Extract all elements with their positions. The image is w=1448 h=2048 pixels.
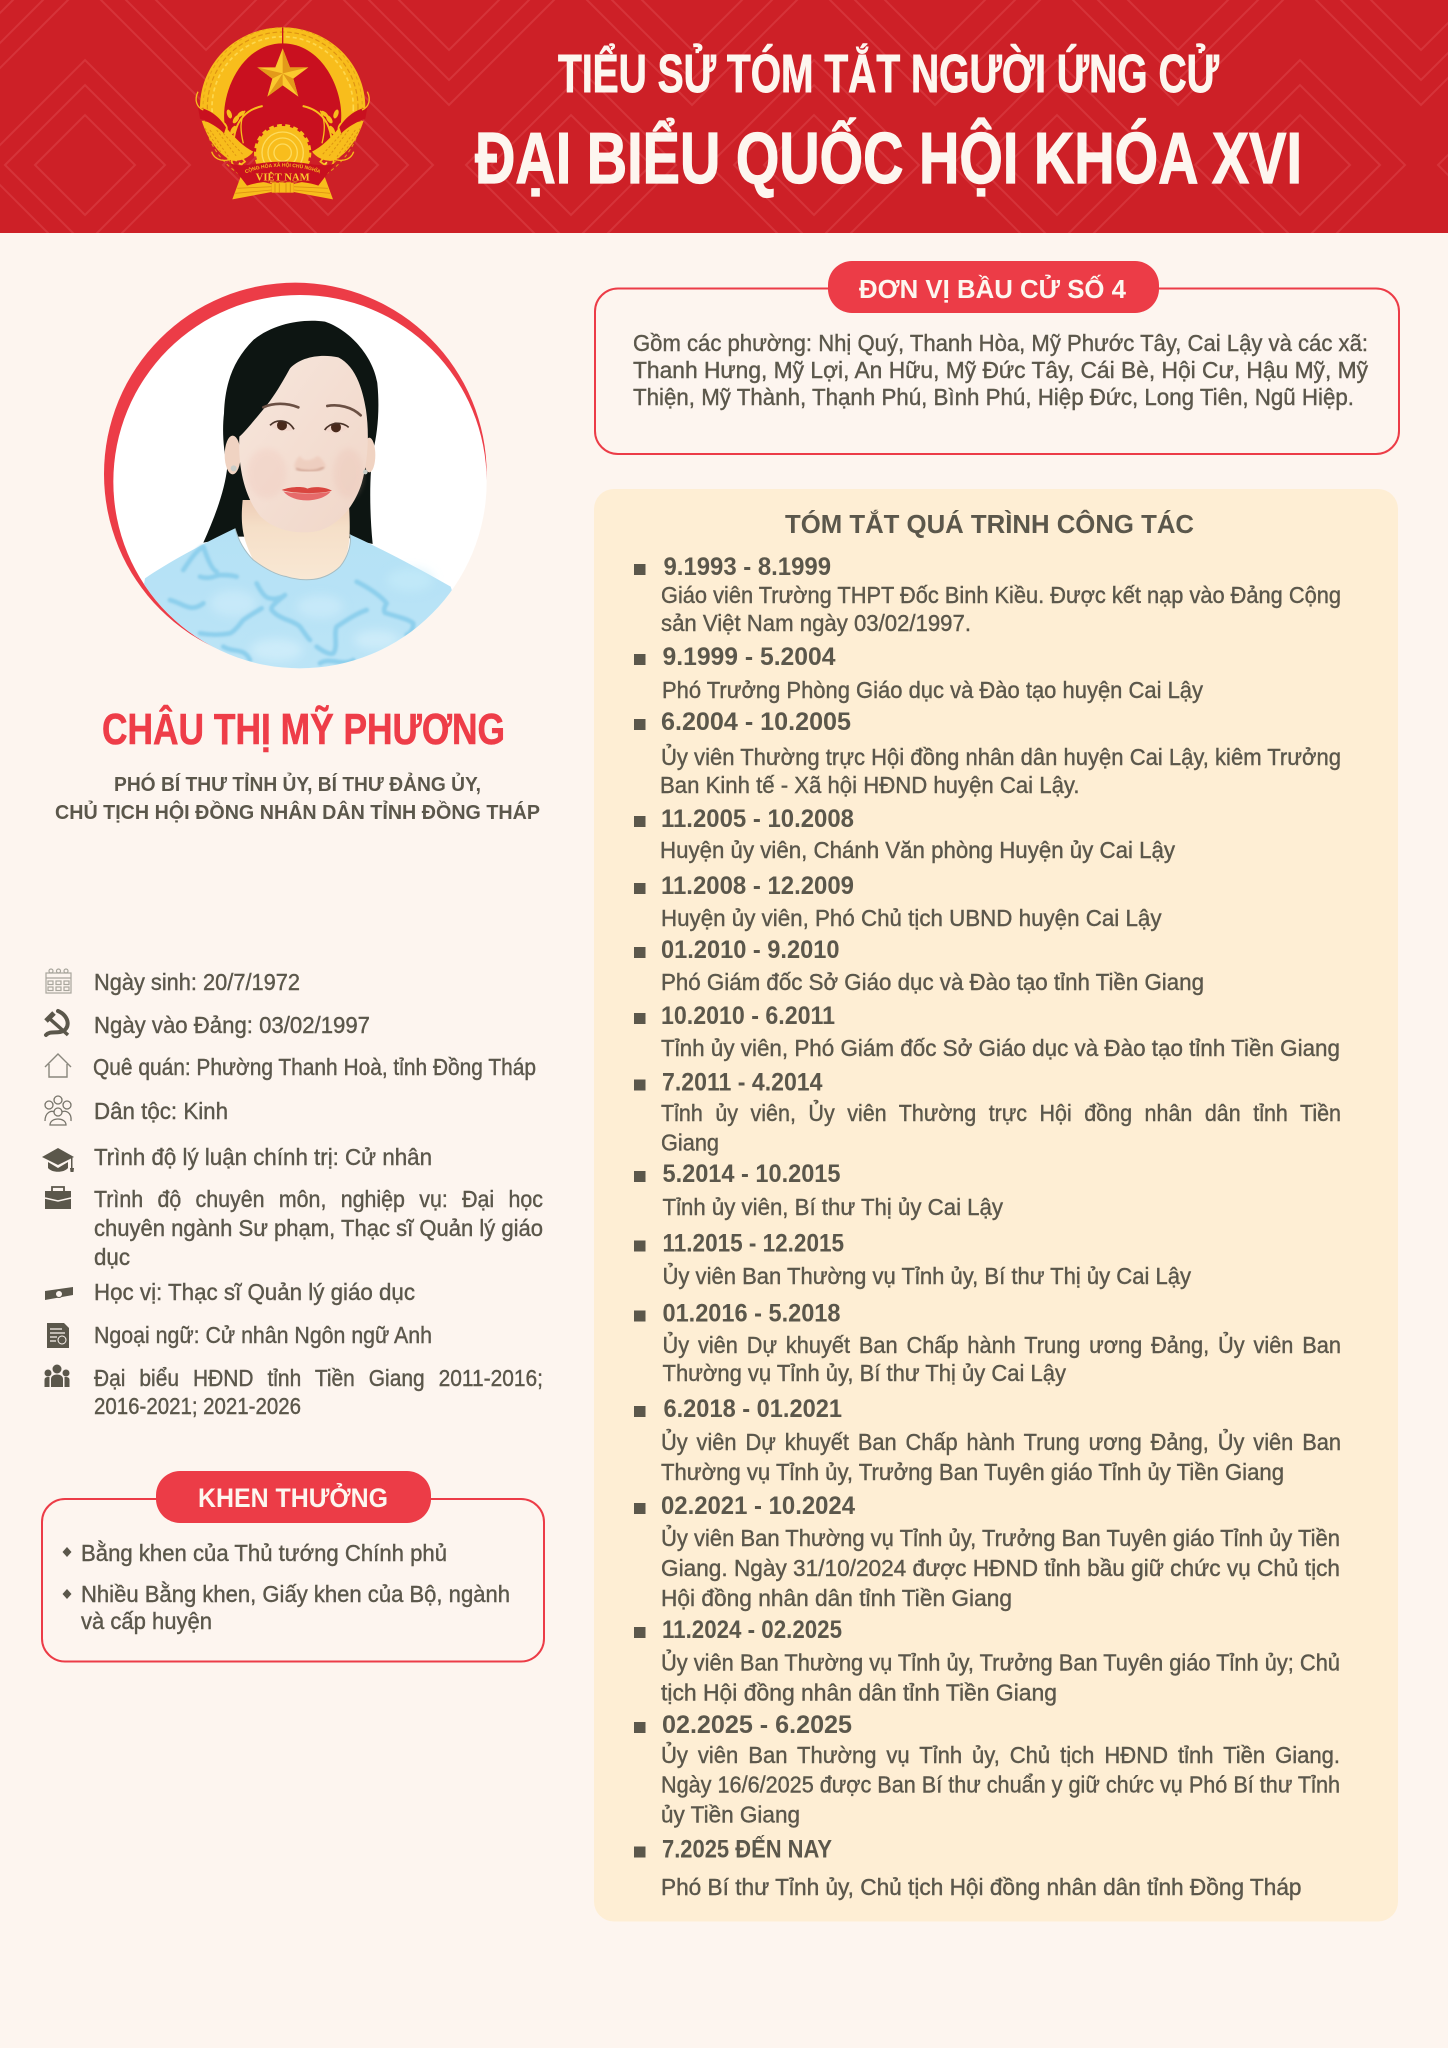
- entry 4: 11.2005 - 10.2008: [661, 805, 854, 833]
- entry 3: Ban Kinh tế - Xã hội HĐND huyện Cai Lậy.: [660, 772, 1080, 798]
- entry 3: Ủy viên Thường trực Hội đồng nhân dân huyện Cai Lậy, kiêm Trưởng: [661, 742, 1341, 770]
- heading pill: awards: [156, 1471, 431, 1523]
- entry 15: 02.2025 - 6.2025: [662, 1711, 852, 1739]
- icon: hammer and sickle: [46, 1011, 68, 1035]
- entry 5: [661, 872, 1162, 931]
- entry 11: [662, 1300, 1341, 1386]
- position: PHÓ BÍ THƯ TỈNH ỦY, BÍ THƯ ĐẢNG ỦY,: [114, 772, 481, 796]
- text: languages: Ngoại ngữ: Cử nhân Ngôn ngữ Anh: [94, 1322, 432, 1348]
- entry 4: [660, 805, 1175, 863]
- entry 15: Ủy viên Ban Thường vụ Tỉnh ủy, Chủ tịch HĐND tỉnh Tiền Giang.: [661, 1740, 1340, 1768]
- entry 16: Phó Bí thư Tỉnh ủy, Chủ tịch Hội đồng nhân dân tỉnh Đồng Tháp: [661, 1874, 1302, 1900]
- heading pill: awards: KHEN THƯỞNG: [198, 1483, 388, 1513]
- icon: national emblem: VIỆT NAM: [256, 171, 310, 184]
- header banner: [0, 0, 1448, 233]
- text: ethnicity: Dân tộc: Kinh: [94, 1098, 228, 1124]
- panel: awards: Nhiều Bằng khen, Giấy khen của Bộ, ngành: [81, 1581, 510, 1607]
- entry 10: [662, 1230, 1191, 1289]
- entry 12: Ủy viên Dự khuyết Ban Chấp hành Trung ương Đảng, Ủy viên Ban: [661, 1427, 1341, 1455]
- icon: graduation cap: [42, 1148, 74, 1172]
- title: TIỂU SỬ TÓM TẮT NGƯỜI ỨNG CỬ: [558, 43, 1219, 104]
- entry 14: 11.2024 - 02.2025: [662, 1616, 842, 1644]
- entry 8: Tỉnh ủy viên, Ủy viên Thường trực Hội đồng nhân dân tỉnh Tiền: [661, 1098, 1341, 1126]
- heading pill: constituency: [828, 261, 1159, 313]
- entry 1: sản Việt Nam ngày 03/02/1997.: [661, 610, 971, 636]
- text: hometown: Quê quán: Phường Thanh Hoà, tỉnh Đồng Tháp: [93, 1054, 536, 1080]
- text: qualification: Trình độ chuyên môn, nghiệp vụ: Đại học: [94, 1186, 543, 1212]
- entry 7: Tỉnh ủy viên, Phó Giám đốc Sở Giáo dục và Đào tạo tỉnh Tiền Giang: [661, 1035, 1340, 1061]
- entry 9: 5.2014 - 10.2015: [662, 1160, 841, 1188]
- text: council delegate: Đại biểu HĐND tỉnh Tiền Giang 2011-2016;: [94, 1365, 543, 1391]
- entry 16: 7.2025 ĐẾN NAY: [662, 1834, 832, 1864]
- panel: career summary: [594, 489, 1398, 1922]
- entry 13: Hội đồng nhân dân tỉnh Tiền Giang: [661, 1585, 1012, 1611]
- entry 12: [661, 1395, 1341, 1485]
- icon: calendar: [46, 969, 71, 993]
- text: political theory: Trình độ lý luận chính trị: Cử nhân: [94, 1144, 432, 1170]
- entry 8: [661, 1068, 1341, 1156]
- entry 1: 9.1993 - 8.1999: [664, 553, 831, 581]
- entry 6: Phó Giám đốc Sở Giáo dục và Đào tạo tỉnh Tiền Giang: [661, 969, 1204, 995]
- text: party date: Ngày vào Đảng: 03/02/1997: [94, 1012, 370, 1038]
- entry 6: [661, 936, 1204, 995]
- entry 10: 11.2015 - 12.2015: [662, 1230, 844, 1258]
- entry 11: Thường vụ Tỉnh ủy, Bí thư Thị ủy Cai Lậy: [662, 1360, 1066, 1386]
- entry 14: tịch Hội đồng nhân dân tỉnh Tiền Giang: [661, 1680, 1057, 1706]
- entry 9: [662, 1160, 1003, 1220]
- panel: awards: [42, 1471, 544, 1662]
- panel: constituency: Gồm các phường: Nhị Quý, Thanh Hòa, Mỹ Phước Tây, Cai Lậy và các xã:: [633, 330, 1368, 356]
- entry 13: [661, 1492, 1340, 1611]
- icon: home: [45, 1054, 71, 1077]
- entry 15: ủy Tiền Giang: [661, 1802, 800, 1828]
- icon: briefcase: [45, 1187, 71, 1209]
- icon: national emblem: [196, 27, 370, 200]
- entry 3: [660, 708, 1341, 798]
- text: council delegate: 2016-2021; 2021-2026: [94, 1393, 301, 1419]
- heading pill: constituency: ĐƠN VỊ BẦU CỬ SỐ 4: [859, 273, 1127, 304]
- personal details list: [42, 969, 543, 1419]
- entry 2: Phó Trưởng Phòng Giáo dục và Đào tạo huyện Cai Lậy: [662, 677, 1203, 703]
- text: qualification: dục: [94, 1244, 130, 1270]
- position: CHỦ TỊCH HỘI ĐỒNG NHÂN DÂN TỈNH ĐỒNG THÁP: [55, 800, 540, 824]
- entry 5: 11.2008 - 12.2009: [661, 872, 854, 900]
- panel: awards: và cấp huyện: [81, 1608, 212, 1634]
- entry 10: Ủy viên Ban Thường vụ Tỉnh ủy, Bí thư Thị ủy Cai Lậy: [662, 1261, 1191, 1289]
- entry 16: [661, 1834, 1302, 1900]
- entry 5: Huyện ủy viên, Phó Chủ tịch UBND huyện Cai Lậy: [661, 905, 1162, 931]
- entry 15: [661, 1711, 1340, 1828]
- career list bullets: [634, 564, 646, 1858]
- text: qualification: [94, 1186, 543, 1270]
- title: [475, 43, 1302, 199]
- entry 12: Thường vụ Tỉnh ủy, Trưởng Ban Tuyên giáo Tỉnh ủy Tiền Giang: [661, 1459, 1284, 1485]
- entry 1: Giáo viên Trường THPT Đốc Binh Kiều. Được kết nạp vào Đảng Cộng: [661, 582, 1341, 608]
- icon: diploma: [45, 1287, 73, 1300]
- entry 12: 6.2018 - 01.2021: [664, 1395, 842, 1423]
- portrait photo: [104, 283, 490, 703]
- entry 15: Ngày 16/6/2025 được Ban Bí thư chuẩn y giữ chức vụ Phó Bí thư Tỉnh: [661, 1772, 1340, 1798]
- panel: constituency: Thiện, Mỹ Thành, Thạnh Phú, Bình Phú, Hiệp Đức, Long Tiên, Ngũ Hiệp.: [633, 384, 1354, 410]
- text: qualification: chuyên ngành Sư phạm, Thạc sĩ Quản lý giáo: [94, 1215, 543, 1241]
- entry 14: [661, 1616, 1340, 1706]
- text: council delegate: [94, 1365, 543, 1419]
- text: birth date: Ngày sinh: 20/7/1972: [94, 969, 300, 995]
- entry 1: [661, 553, 1341, 636]
- panel: constituency: Thanh Hưng, Mỹ Lợi, An Hữu, Mỹ Đức Tây, Cái Bè, Hội Cư, Hậu Mỹ, Mỹ: [633, 357, 1368, 383]
- entry 8: Giang: [661, 1130, 719, 1156]
- icon: national emblem: CỘNG HÒA XÃ HỘI CHỦ NGHĨA: [245, 162, 320, 174]
- entry 6: 01.2010 - 9.2010: [661, 936, 840, 964]
- icon: people outline: [45, 1096, 71, 1125]
- entry 7: 10.2010 - 6.2011: [661, 1002, 835, 1030]
- entry 13: 02.2021 - 10.2024: [661, 1492, 855, 1520]
- icon: people solid: [44, 1364, 70, 1387]
- panel: awards: Bằng khen của Thủ tướng Chính phủ: [81, 1540, 447, 1566]
- icon: certificate: [47, 1323, 69, 1348]
- text: degree: Học vị: Thạc sĩ Quản lý giáo dục: [94, 1279, 415, 1305]
- position: [55, 772, 540, 824]
- entry 11: Ủy viên Dự khuyết Ban Chấp hành Trung ương Đảng, Ủy viên Ban: [662, 1330, 1341, 1358]
- entry 11: 01.2016 - 5.2018: [662, 1300, 841, 1328]
- entry 14: Ủy viên Ban Thường vụ Tỉnh ủy, Trưởng Ban Tuyên giáo Tỉnh ủy; Chủ: [661, 1648, 1340, 1676]
- entry 13: Giang. Ngày 31/10/2024 được HĐND tỉnh bầu giữ chức vụ Chủ tịch: [661, 1555, 1340, 1581]
- entry 7: [661, 1002, 1340, 1061]
- panel: constituency: [595, 261, 1399, 454]
- entry 2: 9.1999 - 5.2004: [662, 643, 836, 671]
- entry 4: Huyện ủy viên, Chánh Văn phòng Huyện ủy Cai Lậy: [660, 837, 1175, 863]
- heading: career summary: TÓM TẮT QUÁ TRÌNH CÔNG TÁC: [785, 509, 1194, 539]
- name: CHÂU THỊ MỸ PHƯƠNG: [102, 704, 505, 754]
- entry 2: [662, 643, 1203, 703]
- entry 9: Tỉnh ủy viên, Bí thư Thị ủy Cai Lậy: [662, 1194, 1003, 1220]
- entry 3: 6.2004 - 10.2005: [661, 708, 851, 736]
- entry 8: 7.2011 - 4.2014: [662, 1068, 823, 1096]
- entry 13: Ủy viên Ban Thường vụ Tỉnh ủy, Trưởng Ban Tuyên giáo Tỉnh ủy Tiền: [661, 1523, 1340, 1551]
